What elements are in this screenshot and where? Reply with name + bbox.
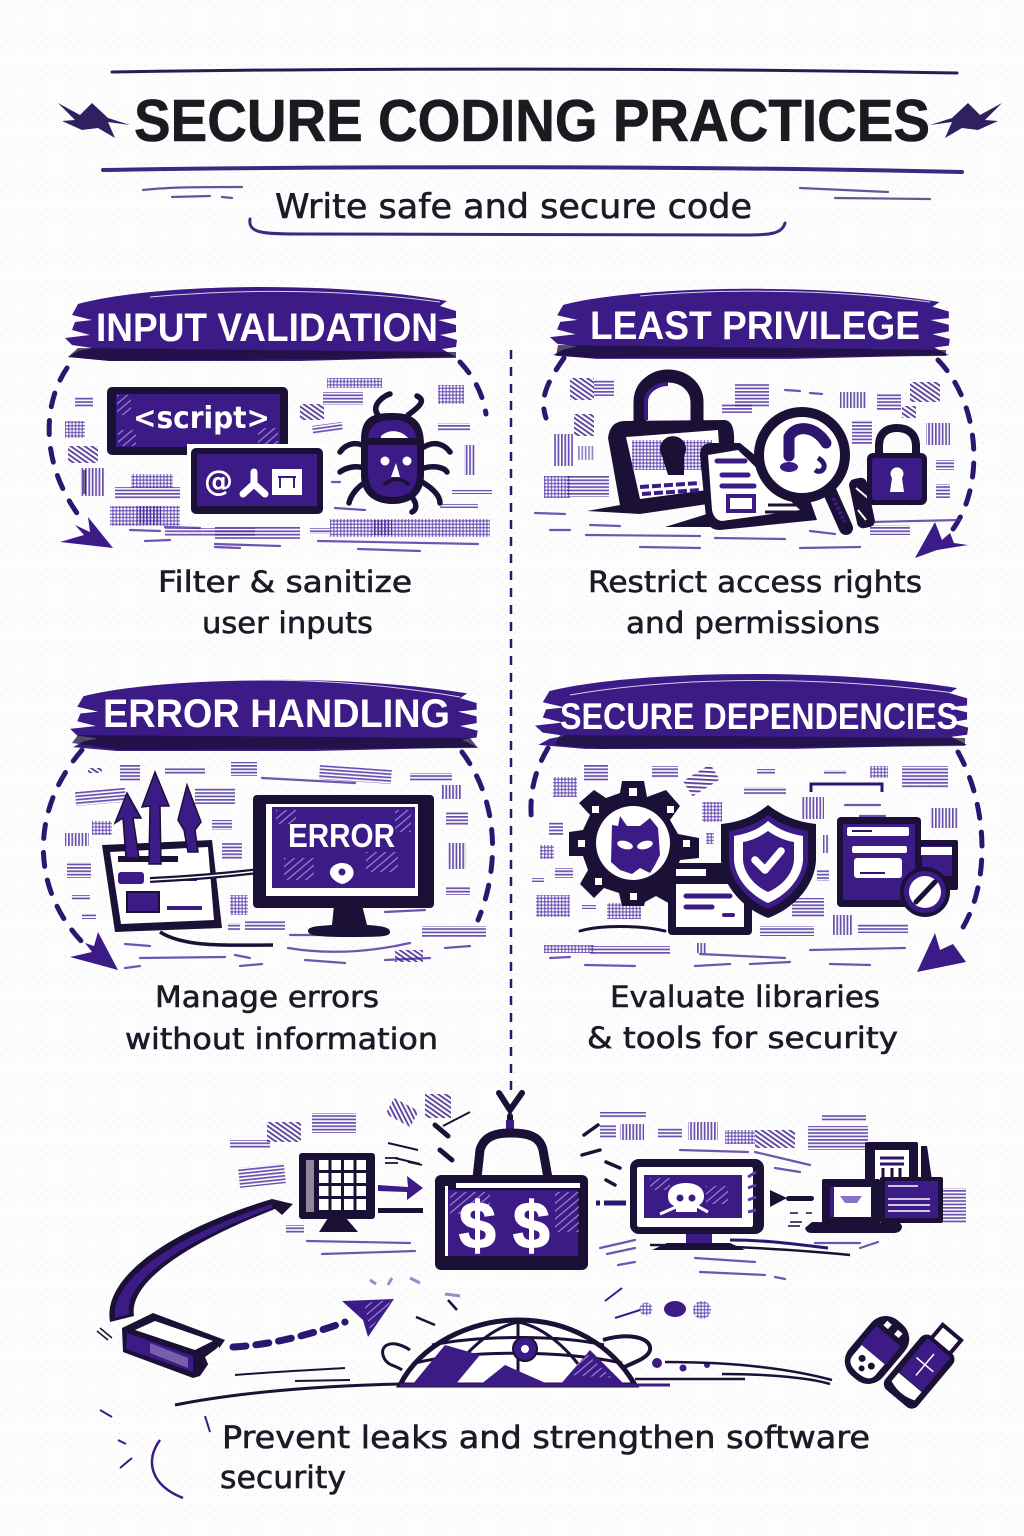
icon: gear with bug: [569, 781, 699, 906]
caption: Evaluate libraries: [610, 980, 880, 1014]
icon: money padlock bag: [435, 1093, 588, 1270]
heading: least privilege: LEAST PRIVILEGE: [590, 304, 920, 348]
icon: usb drive two: [881, 1319, 968, 1412]
dashed arc arrow: [544, 358, 974, 558]
dashed arc arrow: [43, 750, 493, 970]
icon: magnifying glass: [759, 412, 876, 529]
caption: without information: [125, 1022, 438, 1056]
panel: secure dependencies: [531, 674, 982, 1055]
heading: secure dependencies: [535, 674, 968, 749]
icon: shield with check: [721, 805, 816, 918]
center dashed divider: [510, 350, 512, 1096]
icon: money padlock bag: $: [459, 1188, 496, 1262]
caption: and permissions: [626, 606, 880, 640]
caption: Filter & sanitize: [158, 565, 412, 599]
bottom decorative marks: [100, 1410, 210, 1498]
subtitle: Write safe and secure code: [275, 187, 752, 227]
icon: right lightning bolt: [930, 103, 1002, 138]
caption: [588, 565, 922, 640]
sketch hatching: [65, 378, 492, 551]
heading: secure dependencies: SECURE DEPENDENCIES: [560, 696, 958, 737]
icon: usb drive one: [837, 1308, 917, 1392]
sketch hatching: [230, 1094, 966, 1296]
icon: symbols box: [187, 444, 328, 518]
icon: dependency document: [668, 863, 752, 935]
caption: [158, 565, 412, 640]
panel: bottom scene: [97, 1093, 968, 1498]
icon: devices: [805, 1142, 943, 1233]
icon: small padlock: [867, 428, 927, 505]
panel: input validation: [49, 287, 492, 640]
icon: scattered dots: [640, 1301, 711, 1319]
arrow: bag to skull monitor: [596, 1200, 626, 1206]
caption: & tools for security: [587, 1021, 898, 1055]
icon: globe: [383, 1320, 710, 1385]
ground motion lines: [175, 1288, 832, 1405]
arrow: dashed to globe: [233, 1299, 394, 1347]
icon: document: [665, 443, 817, 530]
icon: script box: <script>: [133, 401, 270, 436]
caption: security: [220, 1460, 346, 1496]
caption: [587, 980, 898, 1055]
icon: error monitor: [253, 795, 434, 937]
panel: error handling: [43, 680, 493, 1056]
sketch hatching: [535, 378, 960, 548]
icon: curved arrow from camera: [109, 1199, 293, 1322]
caption: Manage errors: [155, 980, 379, 1014]
caption: user inputs: [202, 606, 373, 640]
icon: calendar monitor: [299, 1153, 375, 1232]
icon: script box: [107, 387, 288, 455]
orbit rings: [383, 1336, 710, 1372]
arrow: skull monitor to devices: [770, 1190, 814, 1226]
heading: error handling: [70, 680, 478, 751]
caption: [125, 980, 438, 1056]
heading: error handling: ERROR HANDLING: [103, 692, 450, 736]
title block: [58, 69, 1002, 235]
arrows rising from window: [115, 772, 201, 864]
sketch hatching: [65, 762, 486, 968]
icon: left lightning bolt: [58, 103, 130, 138]
arrow: monitor to bag: [378, 1158, 423, 1213]
icon: skull monitor: [630, 1159, 764, 1250]
panel: least privilege: [535, 289, 974, 640]
title: SECURE CODING PRACTICES: [134, 88, 930, 154]
icon: error window with arrows: [102, 772, 273, 945]
caption: Restrict access rights: [588, 565, 922, 599]
icon: money padlock bag: $: [513, 1188, 550, 1262]
heading: input validation: [65, 287, 457, 361]
icon: windows with compass badge: [837, 817, 958, 915]
caption: Prevent leaks and strengthen software: [222, 1420, 870, 1456]
icon: large padlock: [587, 376, 735, 514]
sketch hatching: [532, 764, 958, 966]
heading: least privilege: [550, 289, 950, 359]
caption: [220, 1420, 870, 1496]
heading: input validation: INPUT VALIDATION: [96, 306, 438, 350]
icon: bug: [340, 394, 450, 512]
icon: symbols box: @: [204, 464, 233, 498]
icon: camera box: [97, 1313, 225, 1378]
dashed arc arrow: [49, 362, 486, 548]
dashed arc arrow: [531, 748, 982, 972]
icon: error monitor: ERROR: [288, 817, 395, 854]
